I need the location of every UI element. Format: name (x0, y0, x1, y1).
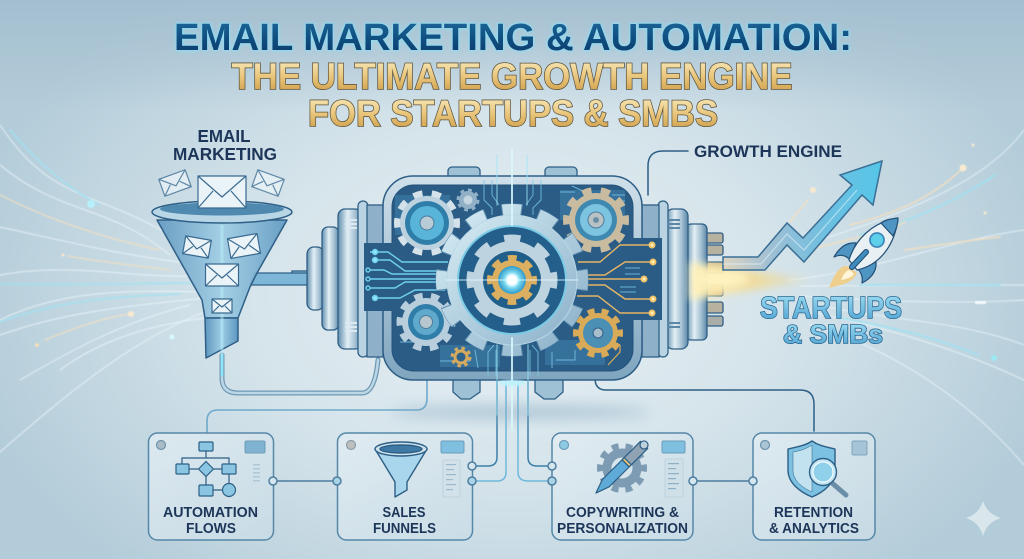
connecting lines between cards (273, 480, 753, 482)
side circuit openings (364, 238, 662, 320)
envelope inner 4 (212, 299, 232, 313)
text: automation flows: AUTOMATION (163, 505, 258, 521)
central light beams (446, 150, 578, 430)
label: startups & smbs (760, 290, 902, 349)
funnel spout (205, 318, 238, 358)
title line 3: FOR STARTUPS & SMBS (308, 93, 718, 134)
envelope inner 1 (183, 236, 211, 258)
text: retention & analytics: RETENTION (774, 505, 853, 521)
text: copywriting & personalization (557, 505, 688, 537)
icon: funnel (375, 442, 427, 497)
envelopes (159, 170, 284, 313)
label: startups & smbs: & SMBs (783, 319, 883, 349)
text: sales funnels: SALES (382, 505, 426, 521)
funnel (152, 201, 307, 358)
gold center gear (490, 258, 534, 302)
card: automation flows (148, 433, 274, 540)
rocket center fin (852, 252, 866, 267)
envelope large (198, 176, 246, 208)
label: email marketing: MARKETING (173, 144, 277, 164)
trace: gold corner (608, 345, 620, 365)
card: sales funnels (338, 433, 472, 540)
label: startups & smbs: STARTUPS (760, 290, 902, 325)
connector nodes (269, 462, 757, 485)
envelope left (159, 170, 191, 196)
gold circuit traces (577, 242, 656, 316)
blue circuit traces (366, 250, 448, 300)
side details (345, 219, 680, 332)
connector pipes (207, 151, 814, 481)
envelope inner 3 (206, 264, 238, 286)
gear: small top (458, 190, 478, 210)
text: sales funnels: FUNNELS (373, 521, 436, 537)
left end caps (292, 201, 383, 357)
title (174, 17, 852, 134)
funnel pipe to engine (250, 273, 307, 285)
light streaks: right (790, 130, 1024, 465)
gear: small gold (452, 348, 470, 366)
engine (292, 150, 723, 430)
housing (383, 176, 642, 380)
light streaks: left (0, 125, 205, 452)
rocket nose (881, 218, 898, 236)
card: copywriting & personalization (552, 433, 693, 540)
icon: shield and magnifier (788, 441, 846, 497)
icon: flowchart (176, 442, 236, 496)
growth arrow (723, 161, 882, 270)
rocket (829, 218, 898, 288)
rocket fins (834, 243, 856, 260)
label: email marketing: EMAIL (198, 126, 251, 146)
label: growth engine: GROWTH ENGINE (694, 143, 842, 161)
rocket flame (829, 266, 857, 288)
right end caps (642, 201, 723, 357)
fine circuit details (400, 180, 640, 376)
funnel rim (152, 201, 292, 223)
icon: gear and pen (592, 439, 650, 497)
circuit panels (395, 190, 625, 367)
gear: bottom left (400, 296, 452, 348)
housing tabs (448, 167, 577, 399)
sparkle mark (966, 501, 1001, 536)
exhaust glow (690, 262, 820, 300)
title line 1: EMAIL MARKETING & AUTOMATION: (174, 17, 852, 59)
text: sales funnels (373, 505, 436, 537)
text: retention & analytics (769, 505, 859, 537)
rocket body (849, 218, 898, 270)
gear: bottom right gold (576, 311, 620, 355)
text: copywriting & personalization: COPYWRITING & (566, 505, 679, 521)
text: retention & analytics: & ANALYTICS (769, 521, 859, 537)
rocket window (870, 233, 884, 247)
shadow band under engine (390, 406, 650, 418)
funnel cone (157, 220, 287, 318)
gear: top right (567, 191, 625, 249)
envelope inner 2 (227, 234, 261, 258)
gear: top left (398, 194, 456, 252)
card: retention & analytics (753, 433, 875, 540)
text: copywriting & personalization: PERSONALIZATION (557, 521, 688, 537)
envelope right (252, 170, 284, 196)
label: email marketing (173, 126, 277, 164)
text: automation flows (163, 505, 258, 537)
text: automation flows: FLOWS (186, 521, 236, 537)
main gear (442, 210, 582, 350)
title line 2: THE ULTIMATE GROWTH ENGINE (232, 56, 792, 97)
